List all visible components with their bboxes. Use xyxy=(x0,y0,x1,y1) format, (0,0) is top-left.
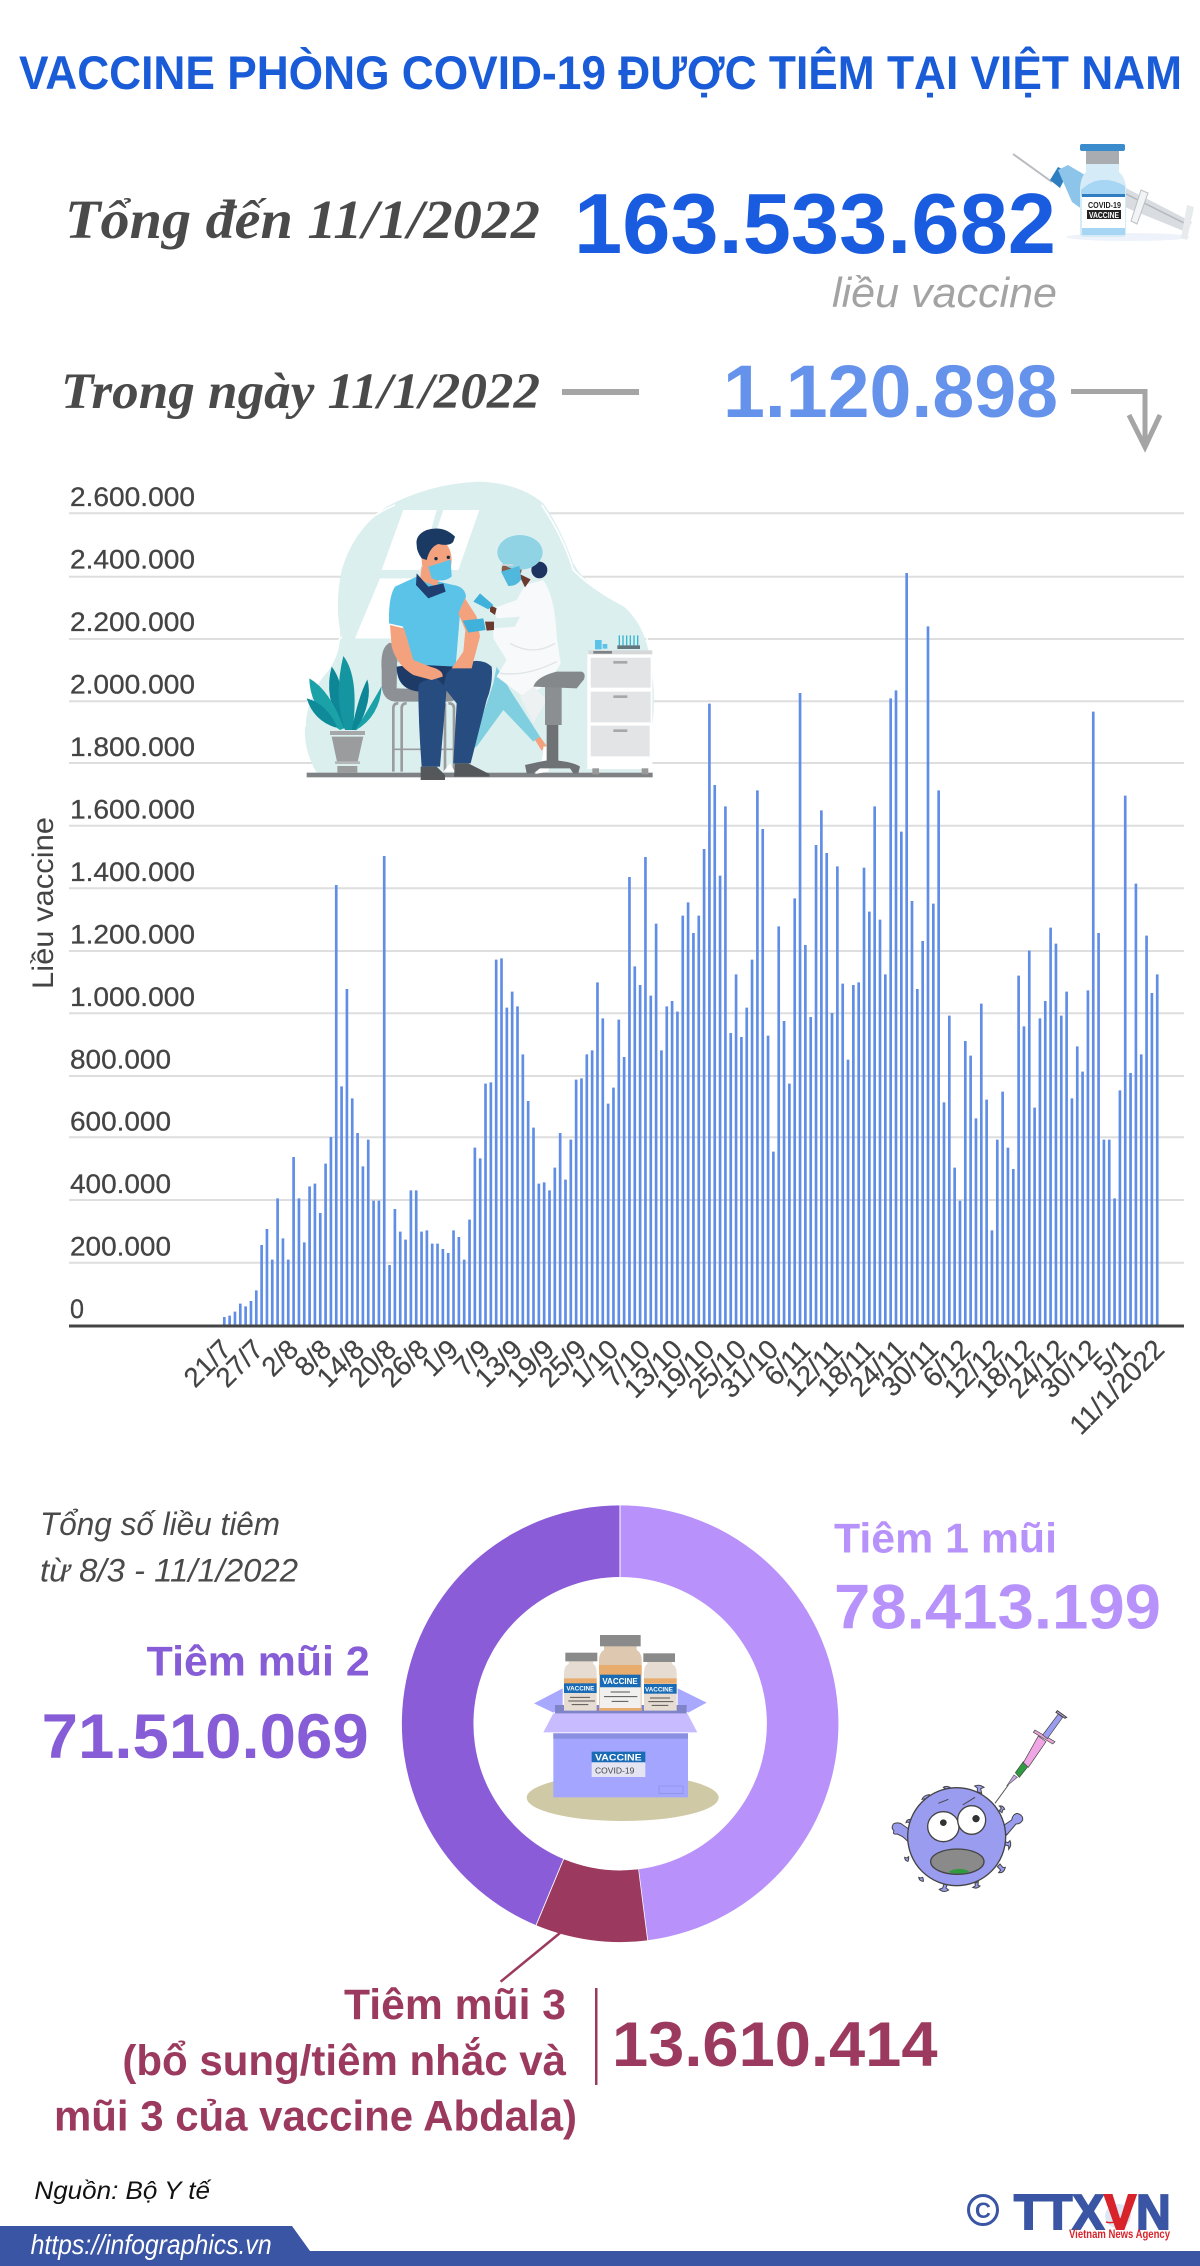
heading: total to date: Tổng đến 11/1/2022 xyxy=(65,189,540,250)
x axis labels: 18/11 xyxy=(811,1333,880,1402)
chair xyxy=(381,643,457,772)
y axis labels: 400.000 xyxy=(70,1169,171,1199)
icon: virus with syringe xyxy=(892,1711,1067,1892)
footer bar with website: https://infographics.vn xyxy=(31,2229,272,2260)
x axis labels: 25/9 xyxy=(532,1333,592,1393)
y axis labels: 1.200.000 xyxy=(70,920,195,950)
x axis line xyxy=(69,1324,1184,1328)
x axis labels: 21/7 xyxy=(177,1333,237,1393)
logo: TTXVN: C xyxy=(975,2198,991,2223)
icon: vaccine box with vials: VACCINE xyxy=(595,1753,642,1763)
x axis labels: 7/9 xyxy=(447,1333,496,1382)
x axis labels: 27/7 xyxy=(209,1333,269,1393)
nurse xyxy=(443,535,561,774)
x axis labels: 8/8 xyxy=(288,1333,337,1382)
icon: vaccine box with vials xyxy=(527,1635,719,1821)
y axis labels: 1.000.000 xyxy=(70,982,195,1012)
label: third dose: Tiêm mũi 3 xyxy=(344,1981,566,2029)
text: total doses note: từ 8/3 - 11/1/2022 xyxy=(40,1552,298,1588)
label: second dose xyxy=(42,1638,370,1772)
x axis labels: 19/10 xyxy=(650,1333,720,1404)
x axis labels: 13/9 xyxy=(468,1333,528,1393)
label: third dose: mũi 3 của vaccine Abdala) xyxy=(54,2092,577,2140)
patient xyxy=(389,528,492,780)
y axis labels: 600.000 xyxy=(70,1106,171,1136)
slice: third dose xyxy=(536,1859,647,1942)
unit label: liều vaccine xyxy=(832,269,1057,316)
x axis labels xyxy=(177,1333,1170,1440)
icon: vaccine box with vials: COVID-19 xyxy=(595,1765,635,1775)
x axis labels: 6/12 xyxy=(916,1333,976,1393)
x axis labels: 1/9 xyxy=(415,1333,464,1382)
daily doses number: 1.120.898 xyxy=(723,350,1058,433)
label: third dose: 13.610.414 xyxy=(612,2010,938,2080)
y axis labels: 2.000.000 xyxy=(70,670,195,700)
footer bar with website xyxy=(0,2226,1200,2266)
x axis labels: 5/1 xyxy=(1087,1333,1136,1382)
cabinet xyxy=(587,635,652,774)
x axis labels: 12/11 xyxy=(779,1333,848,1402)
label: first dose: Tiêm 1 mũi xyxy=(834,1514,1057,1562)
x axis labels: 6/11 xyxy=(758,1333,816,1392)
total doses number: 163.533.682 xyxy=(574,177,1056,272)
stool xyxy=(525,672,585,773)
x axis labels: 14/8 xyxy=(310,1333,370,1393)
x axis labels: 13/10 xyxy=(618,1333,688,1404)
arrow: down xyxy=(1071,392,1160,447)
slice: first dose xyxy=(620,1505,838,1940)
label: second dose: Tiêm mũi 2 xyxy=(147,1638,370,1684)
y axis labels: 2.600.000 xyxy=(70,482,195,512)
x axis labels: 30/11 xyxy=(875,1333,944,1402)
x axis labels: 11/1/2022 xyxy=(1063,1333,1170,1440)
heading: today: Trong ngày 11/1/2022 xyxy=(61,364,540,420)
x axis labels: 1/10 xyxy=(564,1333,624,1393)
x axis labels: 26/8 xyxy=(374,1333,434,1393)
illustration: patient receiving vaccine from nurse xyxy=(305,482,654,780)
x axis labels: 24/12 xyxy=(1002,1333,1072,1404)
x axis labels: 31/10 xyxy=(714,1333,784,1404)
y axis labels: 1.400.000 xyxy=(70,857,195,887)
bars xyxy=(224,573,1157,1326)
icon: vaccine vial and syringe: VACCINE xyxy=(1089,211,1120,220)
x axis labels: 24/11 xyxy=(843,1333,912,1402)
logo: TTXVN: Vietnam News Agency xyxy=(1069,2227,1170,2241)
logo: TTXVN: TTXVN xyxy=(1014,2186,1171,2240)
label: first dose xyxy=(834,1514,1161,1642)
x axis labels: 20/8 xyxy=(342,1333,402,1393)
icon: vaccine vial and syringe xyxy=(1013,144,1194,241)
label: third dose xyxy=(54,1933,938,2140)
x axis labels: 12/12 xyxy=(938,1333,1008,1404)
icon: vaccine box with vials: VACCINE xyxy=(566,1687,594,1693)
bar chart: daily doses xyxy=(27,482,1184,1440)
icon: vaccine box with vials: VACCINE xyxy=(602,1677,638,1686)
slice: second dose xyxy=(402,1505,620,1925)
y axis labels: 2.400.000 xyxy=(70,544,195,574)
y axis labels: 200.000 xyxy=(70,1232,171,1262)
label: second dose: 71.510.069 xyxy=(42,1702,369,1772)
x axis labels: 18/12 xyxy=(970,1333,1040,1404)
y axis labels: 2.200.000 xyxy=(70,607,195,637)
y axis title: Liều vaccine xyxy=(27,817,60,989)
x axis labels: 19/9 xyxy=(500,1333,560,1393)
label: first dose: 78.413.199 xyxy=(834,1572,1161,1642)
text: total doses note xyxy=(40,1506,298,1588)
y axis labels: 1.800.000 xyxy=(70,732,195,762)
x axis labels: 30/12 xyxy=(1034,1333,1104,1404)
x axis labels: 25/10 xyxy=(682,1333,752,1404)
floor xyxy=(307,773,653,777)
dash xyxy=(562,389,639,395)
icon: vaccine vial and syringe: COVID-19 xyxy=(1088,200,1121,210)
plant xyxy=(307,656,382,773)
y axis labels: 800.000 xyxy=(70,1044,171,1074)
label: third dose: (bổ sung/tiêm nhắc và xyxy=(122,2036,567,2085)
y axis labels xyxy=(70,482,195,1324)
x axis labels: 2/8 xyxy=(255,1333,304,1382)
donut chart: doses by shot xyxy=(402,1505,838,1942)
x axis labels: 7/10 xyxy=(596,1333,656,1393)
text: total doses note: Tổng số liều tiêm xyxy=(40,1506,280,1542)
y axis labels: 0 xyxy=(70,1294,84,1324)
icon: vaccine box with vials: VACCINE xyxy=(645,1688,673,1694)
source: Nguồn: Bộ Y tế xyxy=(34,2177,212,2205)
y axis labels: 1.600.000 xyxy=(70,794,195,824)
